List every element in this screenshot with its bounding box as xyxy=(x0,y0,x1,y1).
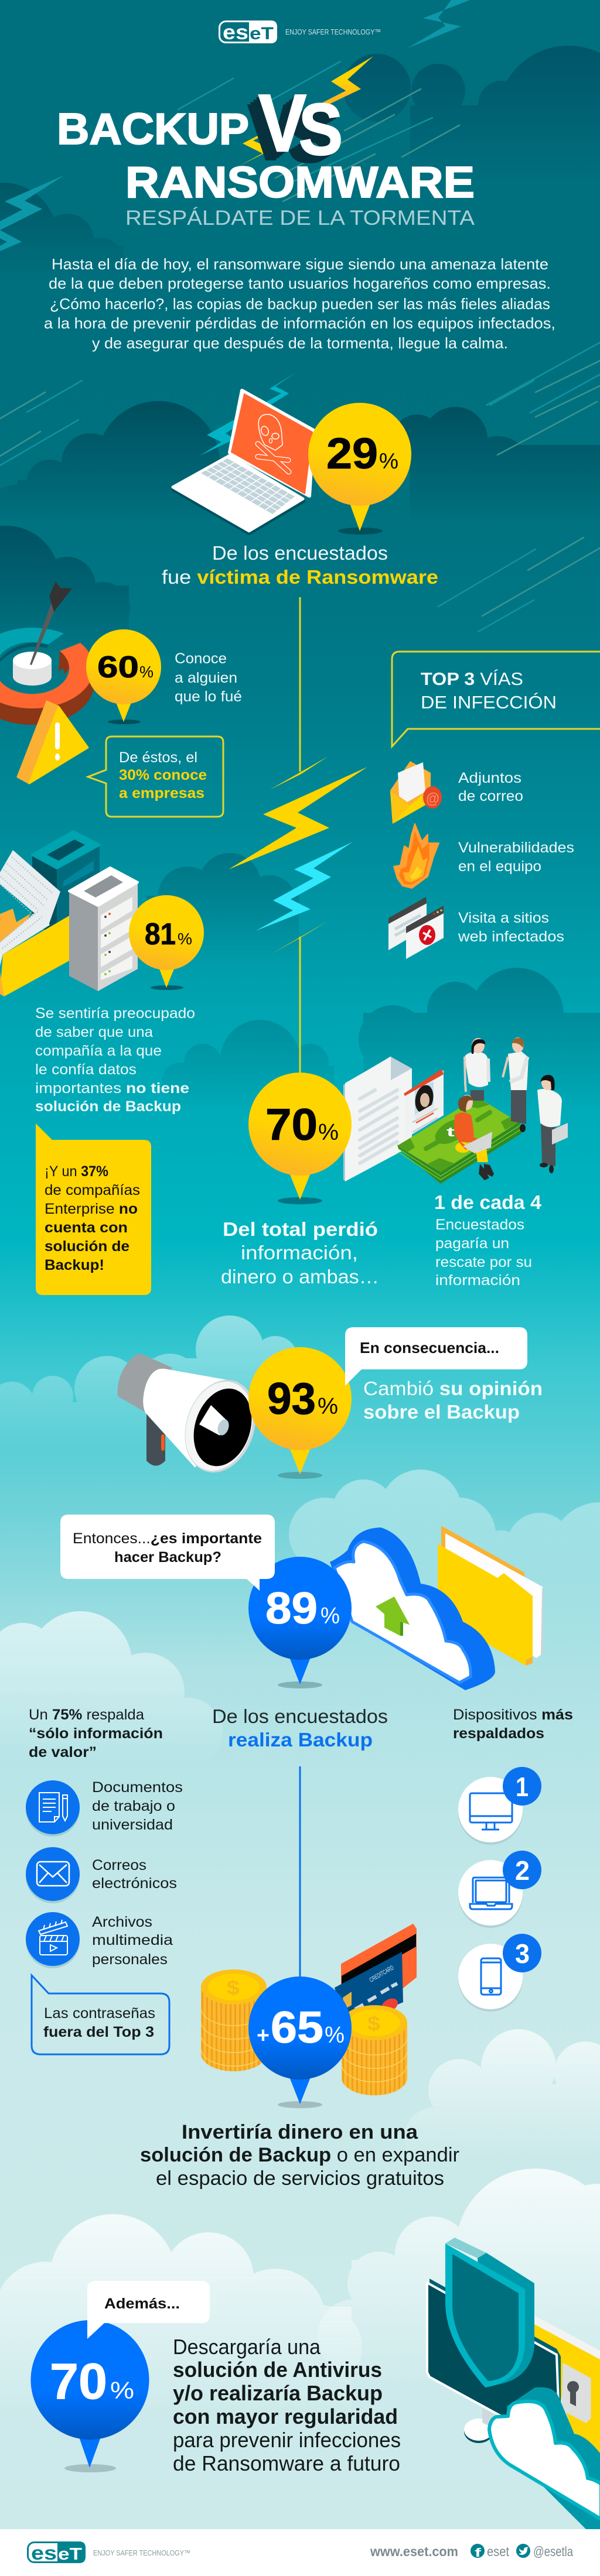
item: documents: universidad xyxy=(92,1817,173,1833)
text: knows someone: a alguien xyxy=(175,670,237,686)
pin: 89%: % xyxy=(321,1604,340,1629)
title: backup vs ransomware: V xyxy=(250,85,298,176)
text: antivirus statement: de Ransomware a futuro xyxy=(173,2451,400,2475)
icon: coin stacks: $ xyxy=(367,2013,380,2035)
panel: top 3 infection routes heading: DE INFECCIÓN xyxy=(421,692,557,712)
heading: most backed-up devices xyxy=(453,1707,573,1742)
footer: eT xyxy=(58,2545,82,2564)
item: multimedia: Archivos xyxy=(92,1914,152,1930)
pin: 60%: % xyxy=(139,663,154,681)
pin: 70% lost: % xyxy=(318,1120,339,1145)
connector line xyxy=(299,597,301,1074)
text: would invest xyxy=(140,2121,459,2190)
text: lost data stat: Del total perdió xyxy=(223,1218,378,1240)
pin: 93% xyxy=(248,1347,352,1479)
item: emails: Correos xyxy=(92,1857,146,1873)
text: worried about companies: solución de Backup xyxy=(35,1098,181,1115)
callout: 30% companies xyxy=(88,737,223,817)
light clouds xyxy=(0,1316,600,2424)
text: 1 in 4 would pay xyxy=(434,1191,542,1289)
intro paragraph: de la que deben protegerse tanto usuarios hogareños como empresas. xyxy=(49,275,551,292)
intro paragraph: y de asegurar que después de la tormenta, llegue la calma. xyxy=(92,334,508,352)
text: lost data stat xyxy=(221,1218,379,1287)
callout: 37% enterprises: de compañías xyxy=(45,1182,140,1198)
device: desktop: 1 xyxy=(516,1772,529,1802)
icon: top right lightning bolt xyxy=(407,0,470,49)
text: changed opinion xyxy=(363,1378,543,1423)
title: backup vs ransomware: S xyxy=(290,96,334,177)
device: desktop xyxy=(458,1767,541,1845)
title: backup vs ransomware: V xyxy=(253,83,301,173)
intro paragraph: ¿Cómo hacerlo?, las copias de backup pueden ser las más fieles aliadas xyxy=(50,295,550,313)
text: victim stat: De los encuestados xyxy=(212,542,388,564)
callout: 30% companies: De éstos, el xyxy=(119,749,197,766)
icon: documents, money and people xyxy=(343,1037,568,1184)
title: backup vs ransomware: S xyxy=(287,98,331,179)
icon: coin stacks: $ xyxy=(227,1977,240,1999)
text: antivirus statement: con mayor regularidad xyxy=(173,2404,398,2428)
text: 1 in 4 would pay: 1 de cada 4 xyxy=(434,1191,542,1213)
text: worried about companies: importantes no tiene xyxy=(35,1080,189,1097)
heading: most backed-up devices: respaldados xyxy=(453,1725,544,1742)
storm clouds xyxy=(0,46,600,1112)
text: would invest: el espacio de servicios gratuitos xyxy=(156,2167,444,2190)
text: antivirus statement: solución de Antivirus xyxy=(173,2358,382,2382)
text: infection routes: Adjuntos xyxy=(458,770,521,786)
device: laptop: 2 xyxy=(515,1855,530,1886)
text: does backup: realiza Backup xyxy=(228,1729,373,1751)
heading: 75% valuable info: “sólo información xyxy=(29,1725,163,1742)
icon: credit cards xyxy=(335,1924,416,2037)
title: backup vs ransomware: S xyxy=(299,90,343,170)
logo: ESET header: eT xyxy=(250,24,274,43)
pin: 93%: % xyxy=(318,1394,338,1419)
callout: 37% enterprises: solución de xyxy=(45,1238,129,1255)
panel: top 3 infection routes heading xyxy=(392,652,600,746)
heading: 75% valuable info: de valor” xyxy=(29,1744,97,1760)
text: would invest: Invertiría dinero en una xyxy=(182,2121,418,2143)
logo: ESET header: ENJOY SAFER TECHNOLOGY™ xyxy=(285,28,381,36)
callout: entonces xyxy=(60,1515,275,1591)
item: emails: electrónicos xyxy=(92,1875,177,1892)
device: phone: 3 xyxy=(515,1938,530,1969)
pin: 81% xyxy=(129,895,204,990)
item: documents xyxy=(26,1779,183,1837)
footer: @esetla xyxy=(533,2544,573,2559)
footer xyxy=(0,2529,600,2576)
text: antivirus statement: para prevenir infecciones xyxy=(173,2428,401,2452)
icon: central lightning bolts xyxy=(229,756,367,954)
title: backup vs ransomware: V xyxy=(247,87,295,178)
icon: target and dart xyxy=(0,581,94,725)
text: does backup: De los encuestados xyxy=(212,1705,388,1727)
title: backup vs ransomware: V xyxy=(255,80,304,171)
connector line xyxy=(299,1766,301,1979)
title: backup vs ransomware: V xyxy=(258,78,306,169)
intro paragraph: a la hora de prevenir pérdidas de información en los equipos infectados, xyxy=(44,314,555,332)
callout: 37% enterprises: Backup! xyxy=(45,1257,104,1273)
pin: 29%: % xyxy=(379,449,398,474)
logo: ESET header: es xyxy=(223,21,248,44)
intro paragraph: Hasta el día de hoy, el ransomware sigue siendo una amenaza latente xyxy=(52,255,548,273)
panel: top 3 infection routes heading: TOP 3 VÍAS xyxy=(421,669,523,689)
pin: 81%: 81 xyxy=(145,917,176,951)
callout: passwords: Las contraseñas xyxy=(44,2005,155,2022)
device: phone xyxy=(458,1934,541,2012)
text: infection routes: en el equipo xyxy=(458,858,541,875)
callout: 30% companies: 30% conoce xyxy=(119,767,207,783)
pin: +65% xyxy=(248,1976,352,2108)
callout: 37% enterprises: cuenta con xyxy=(45,1220,128,1236)
icon: documents, money and people: t xyxy=(446,1125,455,1139)
icon: coin stacks xyxy=(201,1969,407,2095)
icon: title lightning bolt xyxy=(237,56,373,167)
icon: infected email xyxy=(390,761,442,824)
icon: cloud with upload arrow xyxy=(330,1527,495,1690)
text: worried about companies: de saber que una xyxy=(35,1024,153,1040)
text: would invest: solución de Backup o en expandir xyxy=(140,2144,459,2166)
pin: 29% xyxy=(308,403,411,535)
text: victim stat: fue víctima de Ransomware xyxy=(162,566,438,588)
title: backup vs ransomware xyxy=(57,78,475,207)
text: 1 in 4 would pay: pagaría un xyxy=(435,1235,509,1252)
title: backup vs ransomware: S xyxy=(293,94,337,175)
text: does backup xyxy=(212,1705,388,1751)
pin: 93%: 93 xyxy=(267,1374,316,1424)
pin: 60%: 60 xyxy=(97,650,139,684)
text: infection routes: de correo xyxy=(458,788,523,804)
icon: megaphone xyxy=(118,1354,267,1482)
icon: shield, monitor, folder and cloud xyxy=(427,2238,600,2529)
title: backup vs ransomware: BACKUP xyxy=(57,104,249,153)
pin: 70% antivirus: % xyxy=(110,2377,134,2404)
text: lost data stat: información, xyxy=(241,1242,358,1263)
pin: +65%: + xyxy=(257,2023,270,2048)
title: backup vs ransomware: RANSOMWARE xyxy=(125,157,475,207)
text: worried about companies: compañía a la que xyxy=(35,1043,162,1059)
item: documents: de trabajo o xyxy=(92,1798,175,1814)
footer: www.eset.com xyxy=(370,2544,458,2559)
callout: en consecuencia: En consecuencia... xyxy=(360,1339,499,1356)
text: lost data stat: dinero o ambas… xyxy=(221,1266,379,1287)
text: antivirus statement: Descargaría una xyxy=(173,2335,321,2359)
pin: 70% antivirus xyxy=(30,2320,149,2472)
heading: 75% valuable info xyxy=(29,1707,163,1760)
subtitle: RESPÁLDATE DE LA TORMENTA xyxy=(125,207,475,229)
title: backup vs ransomware: S xyxy=(296,93,340,173)
text: knows someone: que lo fué xyxy=(175,688,242,705)
pin: 60% xyxy=(86,629,161,724)
text: changed opinion: sobre el Backup xyxy=(363,1401,520,1423)
callout: 37% enterprises: ¡Y un 37% xyxy=(45,1163,108,1180)
intro paragraph xyxy=(44,255,555,352)
pin: 70% antivirus: 70 xyxy=(50,2354,107,2410)
icon: warning triangle xyxy=(18,701,88,783)
callout: 37% enterprises: Enterprise no xyxy=(45,1201,138,1217)
pin: 70% lost: 70 xyxy=(265,1100,318,1150)
text: 1 in 4 would pay: información xyxy=(435,1272,520,1289)
icon: infected browser windows xyxy=(388,897,444,959)
heading: most backed-up devices: Dispositivos más xyxy=(453,1707,573,1723)
item: multimedia xyxy=(26,1912,173,1968)
callout: entonces: hacer Backup? xyxy=(114,1549,221,1566)
item: documents: Documentos xyxy=(92,1779,183,1796)
callout: entonces: Entonces... ¿es importante xyxy=(73,1530,262,1547)
pin: 29%: 29 xyxy=(326,429,378,478)
text: worried about companies: Se sentiría preocupado xyxy=(35,1005,195,1022)
pin: 70% lost xyxy=(248,1073,352,1204)
footer: ENJOY SAFER TECHNOLOGY™ xyxy=(93,2548,190,2557)
item: emails xyxy=(26,1847,177,1903)
text: 1 in 4 would pay: Encuestados xyxy=(435,1217,524,1233)
text: antivirus statement xyxy=(173,2335,401,2475)
text: worried about companies xyxy=(35,1005,195,1115)
text: changed opinion: Cambió su opinión xyxy=(363,1378,543,1399)
text: infection routes: Vulnerabilidades xyxy=(458,840,574,856)
text: knows someone: Conoce xyxy=(175,650,227,667)
footer: es xyxy=(31,2542,57,2564)
footer: eset xyxy=(487,2544,510,2559)
item: multimedia: multimedia xyxy=(92,1932,173,1948)
callout: además xyxy=(87,2281,210,2339)
pin: 89% xyxy=(248,1557,352,1688)
pin: 89%: 89 xyxy=(265,1584,318,1633)
rain streaks xyxy=(0,61,600,632)
item: multimedia: personales xyxy=(92,1951,168,1968)
text: 1 in 4 would pay: rescate por su xyxy=(435,1254,532,1270)
icon: folder with papers and servers xyxy=(0,831,138,996)
footer: f xyxy=(475,2547,482,2560)
icon: infected laptop xyxy=(173,390,313,533)
pin: 81%: % xyxy=(178,930,192,948)
text: infection routes: Visita a sitios xyxy=(458,910,549,926)
device: laptop xyxy=(458,1851,541,1928)
logo: ESET header xyxy=(219,20,381,44)
heading: 75% valuable info: Un 75% respalda xyxy=(29,1707,144,1723)
callout: passwords xyxy=(32,1975,169,2054)
pin: +65%: 65 xyxy=(271,2003,323,2053)
text: infection routes xyxy=(458,770,574,945)
icon: left lightning bolt xyxy=(0,175,64,251)
callout: 37% enterprises xyxy=(36,1123,151,1295)
callout: además: Además... xyxy=(104,2296,180,2312)
callout: passwords: fuera del Top 3 xyxy=(43,2024,154,2040)
callout: en consecuencia xyxy=(345,1327,527,1386)
text: worried about companies: le confía datos xyxy=(35,1061,137,1078)
icon: folder behind cloud xyxy=(438,1526,543,1666)
text: infection routes: web infectados xyxy=(458,929,564,945)
callout: 30% companies: a empresas xyxy=(119,785,204,801)
text: antivirus statement: y/o realizaría Backup xyxy=(173,2381,383,2405)
icon: flame xyxy=(394,824,439,888)
text: knows someone xyxy=(175,650,242,705)
icon: cyan bolt behind laptop xyxy=(199,372,296,456)
icon: credit cards: CREDITCARD xyxy=(368,1964,395,1984)
icon: infected email: @ xyxy=(426,789,439,807)
text: victim stat xyxy=(162,542,438,588)
pin: +65%: % xyxy=(325,2023,345,2048)
